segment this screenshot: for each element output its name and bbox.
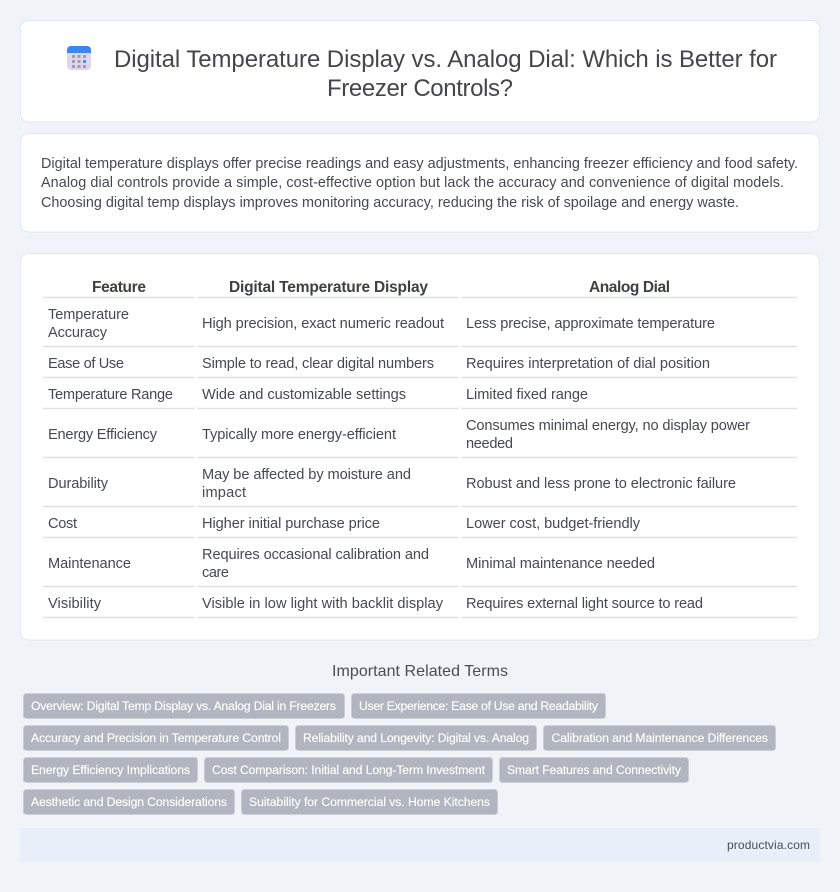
row: visibility: Requires external light source to read	[466, 596, 703, 612]
row: temperature accuracy: Accuracy	[48, 325, 108, 341]
panel: summary paragraph: Choosing digital temp displays improves monitoring accuracy, reducing the risk of spoilage and energy waste.	[41, 195, 739, 211]
row: durability: Durability	[48, 476, 109, 492]
row: energy efficiency	[48, 418, 750, 452]
icon: calendar	[67, 46, 91, 70]
row: cost: Higher initial purchase price	[202, 516, 380, 532]
chip row 3: Cost Comparison: Initial and Long-Term Investment	[212, 763, 486, 777]
row: energy efficiency: needed	[466, 436, 513, 452]
table header	[92, 279, 670, 296]
row: temperature accuracy: Temperature	[48, 307, 129, 323]
footer: productvia.com	[727, 838, 810, 852]
footer	[20, 828, 820, 862]
chip row 4	[24, 790, 498, 814]
chip row 3	[24, 758, 688, 782]
row: energy efficiency: Typically more energy-efficient	[202, 427, 396, 443]
row: ease of use: Simple to read, clear digital numbers	[202, 356, 434, 372]
heading: important related terms: Important Related Terms	[332, 663, 508, 680]
panel: summary paragraph: Analog dial controls provide a simple, cost-effective option but lack the accuracy and convenience of digital models.	[41, 175, 784, 191]
chip row 1: Overview: Digital Temp Display vs. Analog Dial in Freezers	[31, 699, 336, 713]
row: durability: Robust and less prone to electronic failure	[466, 476, 736, 492]
row: maintenance: care	[202, 565, 229, 581]
table header: Digital Temperature Display	[229, 279, 428, 296]
chip row 2: Accuracy and Precision in Temperature Control	[31, 731, 281, 745]
chip row 3: Smart Features and Connectivity	[507, 763, 682, 777]
row: durability: May be affected by moisture and	[202, 467, 411, 483]
row: maintenance	[48, 547, 655, 581]
row: temperature range: Wide and customizable settings	[202, 387, 406, 403]
row: energy efficiency: Energy Efficiency	[48, 427, 158, 443]
row: cost: Cost	[48, 516, 77, 532]
chip row 1	[24, 694, 606, 718]
row: durability	[48, 467, 736, 501]
related term chips	[24, 694, 776, 814]
panel: summary paragraph: Digital temperature displays offer precise readings and easy adjustments, enhancing freezer efficiency and food safety.	[41, 156, 798, 172]
row: durability: impact	[202, 485, 246, 501]
panel: title card	[20, 20, 820, 122]
chip row 4: Suitability for Commercial vs. Home Kitchens	[249, 795, 490, 809]
row: cost: Lower cost, budget-friendly	[466, 516, 641, 532]
panel: summary paragraph	[20, 134, 820, 232]
row: maintenance: Minimal maintenance needed	[466, 556, 655, 572]
title: Digital Temperature Display vs. Analog Dial: Which is Better for	[114, 46, 777, 73]
chip row 2	[24, 726, 776, 750]
chip row 1: User Experience: Ease of Use and Readability	[359, 699, 599, 713]
title: Freezer Controls?	[327, 75, 513, 102]
row: ease of use	[48, 356, 710, 372]
row: maintenance: Requires occasional calibration and	[202, 547, 429, 563]
chip row 3: Energy Efficiency Implications	[31, 763, 190, 777]
row: temperature range: Temperature Range	[48, 387, 173, 403]
chip row 2: Calibration and Maintenance Differences	[552, 731, 768, 745]
row: visibility	[48, 596, 703, 612]
row: ease of use: Ease of Use	[48, 356, 124, 372]
panel: comparison table	[20, 254, 820, 640]
row: energy efficiency: Consumes minimal energy, no display power	[466, 418, 750, 434]
row: temperature range: Limited fixed range	[466, 387, 588, 403]
row: cost	[48, 516, 641, 532]
title	[114, 46, 777, 102]
row: temperature accuracy: High precision, exact numeric readout	[202, 316, 444, 332]
chip row 2: Reliability and Longevity: Digital vs. Analog	[303, 731, 529, 745]
row: temperature accuracy: Less precise, approximate temperature	[466, 316, 715, 332]
row: visibility: Visibility	[48, 596, 102, 612]
row: ease of use: Requires interpretation of dial position	[466, 356, 710, 372]
row: visibility: Visible in low light with backlit display	[202, 596, 444, 612]
row: temperature accuracy	[48, 307, 715, 341]
row: temperature range	[48, 387, 588, 403]
chip row 4: Aesthetic and Design Considerations	[31, 795, 227, 809]
row: maintenance: Maintenance	[48, 556, 131, 572]
table header: Analog Dial	[589, 279, 670, 296]
table header: Feature	[92, 279, 146, 296]
